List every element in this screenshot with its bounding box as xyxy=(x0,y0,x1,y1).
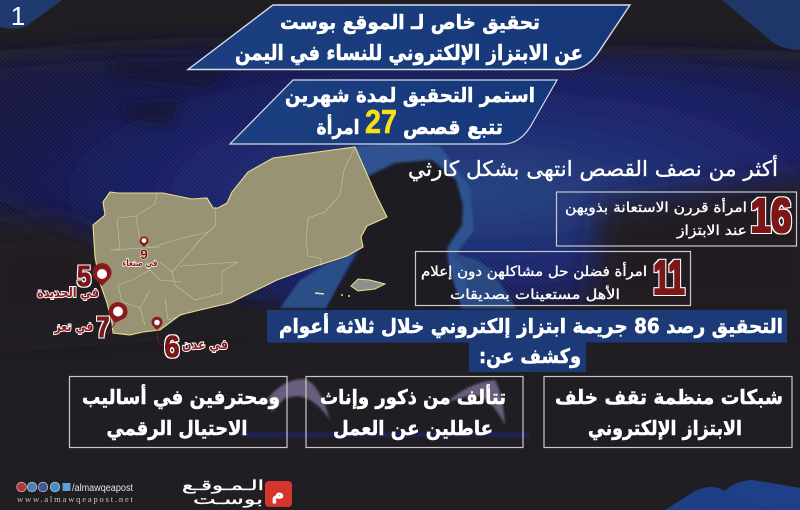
text line 2: عند الابتزاز xyxy=(676,223,747,239)
count Aden: 6 xyxy=(164,329,180,364)
finding line 2: وكشف عن: xyxy=(479,344,581,368)
count Taiz: 7 xyxy=(96,312,110,344)
Socotra island xyxy=(315,279,385,296)
logo wordmark top: الـمـوقـع xyxy=(182,478,264,494)
card line 1: ومحترفين في أساليب xyxy=(82,383,280,410)
icon: facebook xyxy=(38,482,48,492)
corner tab with page number xyxy=(0,0,62,31)
hands on keyboard xyxy=(240,379,530,437)
stat box 16 xyxy=(556,190,796,246)
text line 1: امرأة قررن الاستعانة بذويهن xyxy=(565,198,747,216)
finding card: males and females xyxy=(306,376,523,448)
icon: message xyxy=(62,483,70,491)
pin: Taiz xyxy=(54,302,128,344)
subtitle words: تتبع قصص xyxy=(403,115,503,139)
pin: Hodeidah xyxy=(37,261,112,301)
logo badge xyxy=(265,481,292,507)
number 27: 27 xyxy=(365,103,397,140)
finding band xyxy=(267,310,787,372)
icon: telegram xyxy=(50,482,60,492)
count Sanaa: 9 xyxy=(140,246,148,262)
logo xyxy=(182,478,292,508)
subtitle line 1: استمر التحقيق لمدة شهرين xyxy=(285,83,535,107)
social handle: /almawqeapost xyxy=(72,483,133,494)
hooded figure xyxy=(280,143,516,308)
logo wordmark bottom: بوسـت xyxy=(193,492,263,508)
card line 1: تتألف من ذكور وإناث xyxy=(320,383,506,409)
card line 2: عاطلين عن العمل xyxy=(333,416,493,440)
card line 1: شبكات منظمة تقف خلف xyxy=(555,385,783,409)
card line 2: الابتزاز الإلكتروني xyxy=(588,416,742,441)
corner shape top right xyxy=(722,0,800,50)
title line 2: عن الابتزاز الإلكتروني للنساء في اليمن xyxy=(235,41,583,65)
finding card: organized networks xyxy=(544,376,792,448)
count Hodeidah: 5 xyxy=(77,261,91,293)
social media footer xyxy=(17,482,134,504)
stat box 11 xyxy=(416,252,690,306)
title line 1: تحقيق خاص لـ الموقع بوست xyxy=(280,10,540,34)
pin: Sanaa xyxy=(122,236,158,269)
finding line 1: التحقيق رصد 86 جريمة ابتزاز إلكتروني خلال ثلاثة أعوام xyxy=(279,312,783,339)
icon: youtube xyxy=(17,482,26,492)
icon: twitter xyxy=(27,482,37,492)
corner shapes bottom right xyxy=(665,480,800,510)
card line 2: الاحتيال الرقمي xyxy=(106,416,248,441)
pin: Aden xyxy=(152,317,228,364)
subtitle banner xyxy=(230,80,557,144)
text line 1: امرأة فضلن حل مشاكلهن دون إعلام xyxy=(421,262,647,280)
website: www.almawqeapost.net xyxy=(17,494,134,504)
map of Yemen xyxy=(93,147,387,335)
corner tab with page number: 1 xyxy=(11,1,25,31)
text line 2: الأهل مستعينات بصديقات xyxy=(450,285,620,303)
logo badge letter: م xyxy=(272,484,284,504)
label Aden: في عدن xyxy=(182,338,228,353)
subtitle word women: امرأة xyxy=(316,113,360,139)
title banner xyxy=(188,5,630,70)
number 11: 11 xyxy=(654,252,684,305)
finding card: digital fraud professionals xyxy=(70,376,287,448)
label Sanaa: في صنعاء xyxy=(122,259,158,269)
label Hodeidah: في الحديدة xyxy=(37,286,99,301)
heading: more than half: أكثر من نصف القصص انتهى بشكل كارثي xyxy=(408,155,778,181)
label Taiz: في تعز xyxy=(54,320,94,335)
